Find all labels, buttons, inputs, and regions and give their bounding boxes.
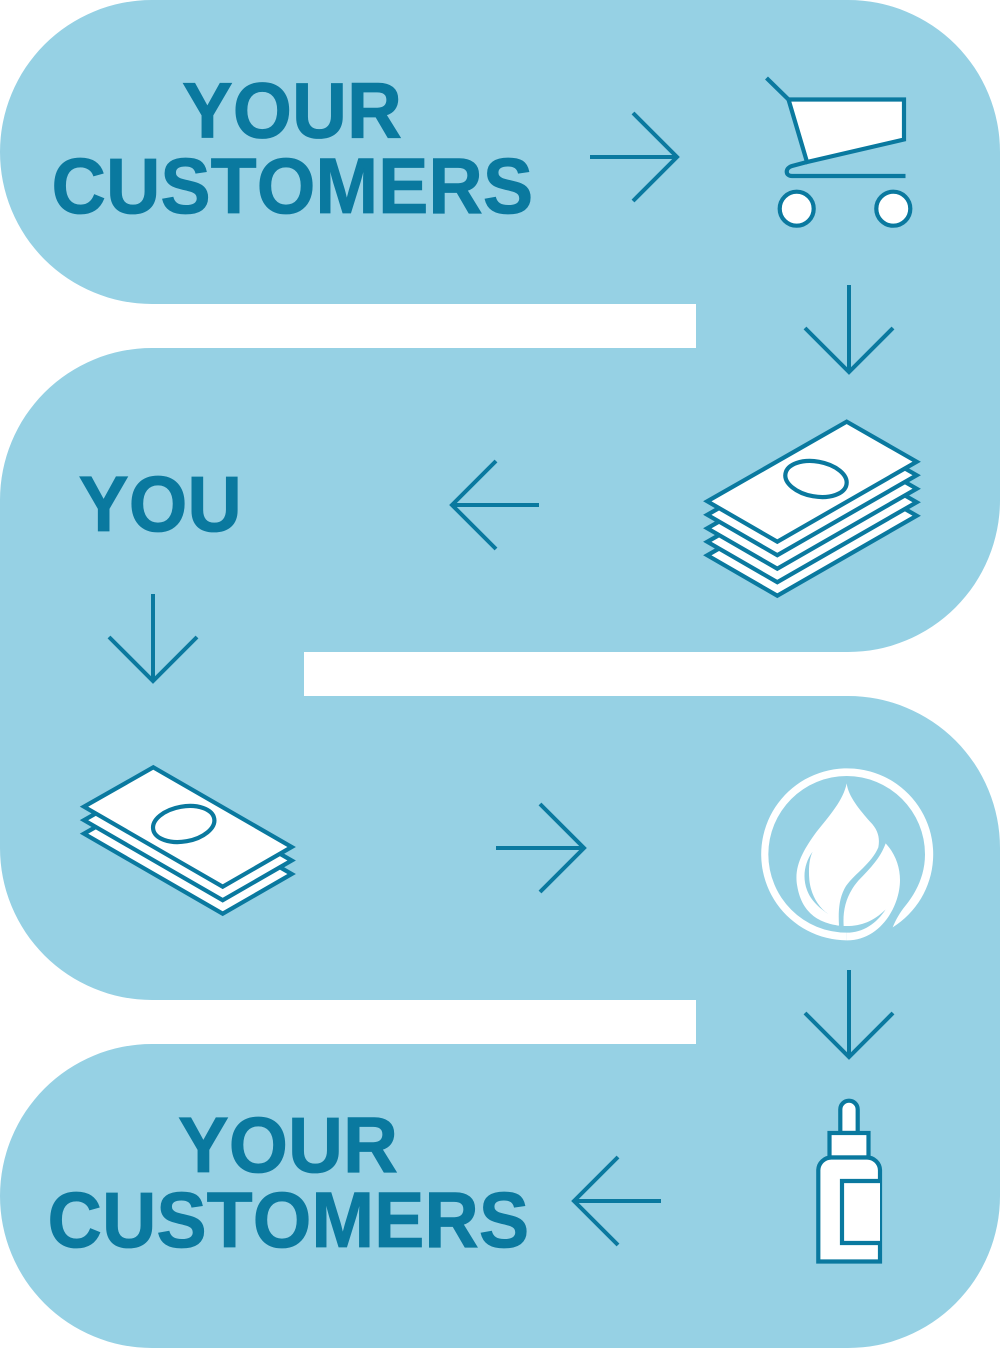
heading: your customers (top): CUSTOMERS [52,142,533,230]
heading: your customers (bottom): YOUR [178,1102,398,1189]
arrow: right to oil logo [496,804,584,892]
icon: small money stack [84,767,292,914]
heading: your customers (top): YOUR [182,67,402,155]
heading: your customers (bottom): CUSTOMERS [48,1176,529,1264]
icon: shopping cart [766,78,910,226]
arrow: left to your customers [574,1157,661,1245]
arrow: right to cart [590,113,677,201]
icon: oil drop and leaf logo [761,768,933,940]
heading: your customers (top) [52,67,533,230]
arrow: down to bottle [805,970,893,1057]
heading: your customers (bottom) [48,1102,529,1264]
heading: you: YOU [78,461,242,548]
icon: dropper bottle [818,1101,880,1262]
arrow: down to small money stack [109,594,197,681]
arrow: down to money stack [805,285,893,372]
arrow: left to you [452,461,539,549]
icon: large money stack [707,422,917,596]
